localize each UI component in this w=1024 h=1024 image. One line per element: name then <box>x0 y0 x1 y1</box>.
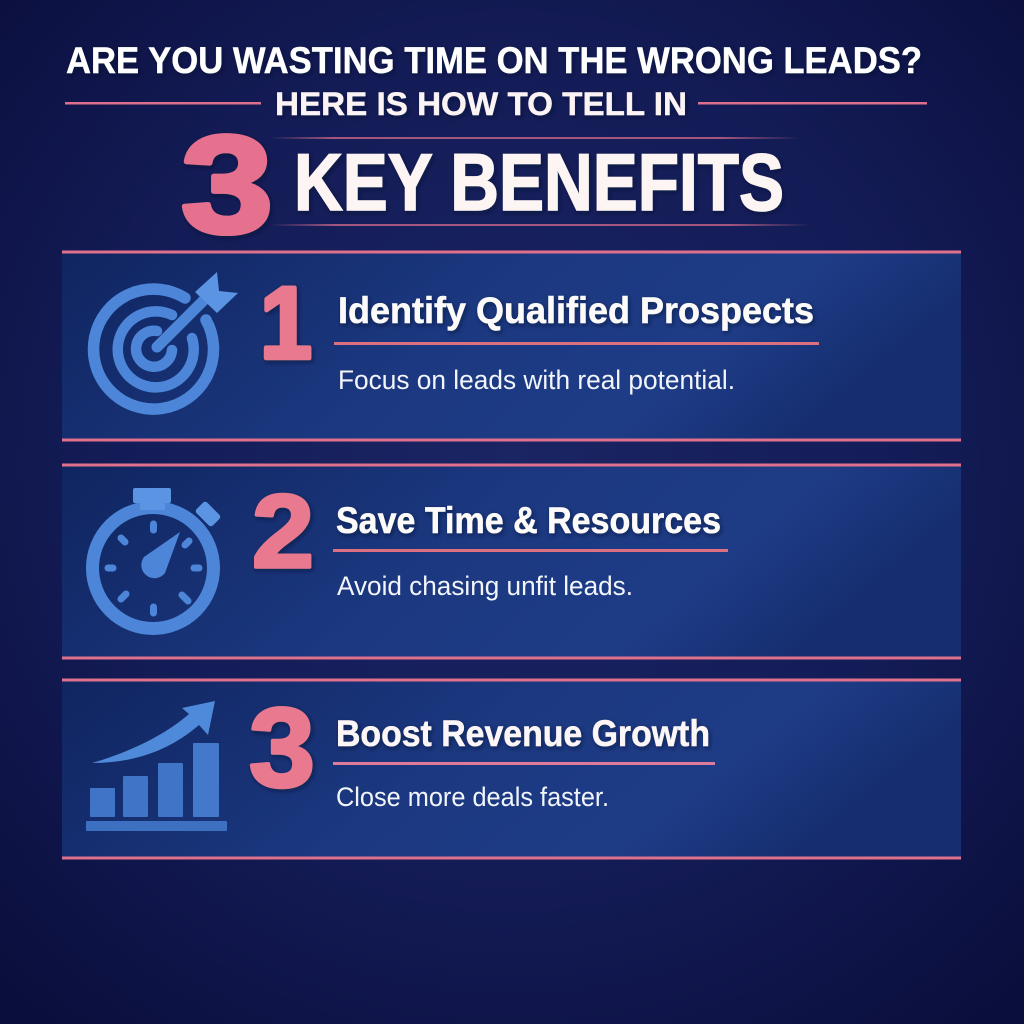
number 1: 1 <box>260 266 312 380</box>
description: Avoid chasing unfit leads. <box>337 571 633 601</box>
divider left <box>65 102 261 104</box>
heading: Boost Revenue Growth <box>336 713 710 754</box>
icon: stopwatch <box>92 488 221 628</box>
rule <box>333 762 715 765</box>
panel: save time and resources <box>62 464 961 660</box>
icon: target with arrow <box>94 272 238 409</box>
heading line 2: HERE IS HOW TO TELL IN <box>275 86 687 122</box>
description: Close more deals faster. <box>336 782 609 812</box>
title block <box>65 40 927 262</box>
icon: rising bar chart <box>86 701 227 831</box>
number 2: 2 <box>252 474 314 590</box>
panel: identify qualified prospects <box>62 250 961 442</box>
description: Focus on leads with real potential. <box>338 365 735 395</box>
divider right <box>698 102 927 104</box>
heading: Save Time & Resources <box>336 500 721 541</box>
key benefits heading: KEY BENEFITS <box>294 138 784 228</box>
heading line 1: ARE YOU WASTING TIME ON THE WRONG LEADS? <box>66 40 922 81</box>
panel: boost revenue growth <box>62 678 961 860</box>
rule <box>333 549 728 552</box>
upper accent rule <box>270 137 800 139</box>
rule <box>334 342 819 345</box>
lower accent rule <box>270 224 810 226</box>
number 3: 3 <box>249 685 315 810</box>
heading: Identify Qualified Prospects <box>338 290 814 331</box>
large numeral 3: 3 <box>181 108 273 262</box>
